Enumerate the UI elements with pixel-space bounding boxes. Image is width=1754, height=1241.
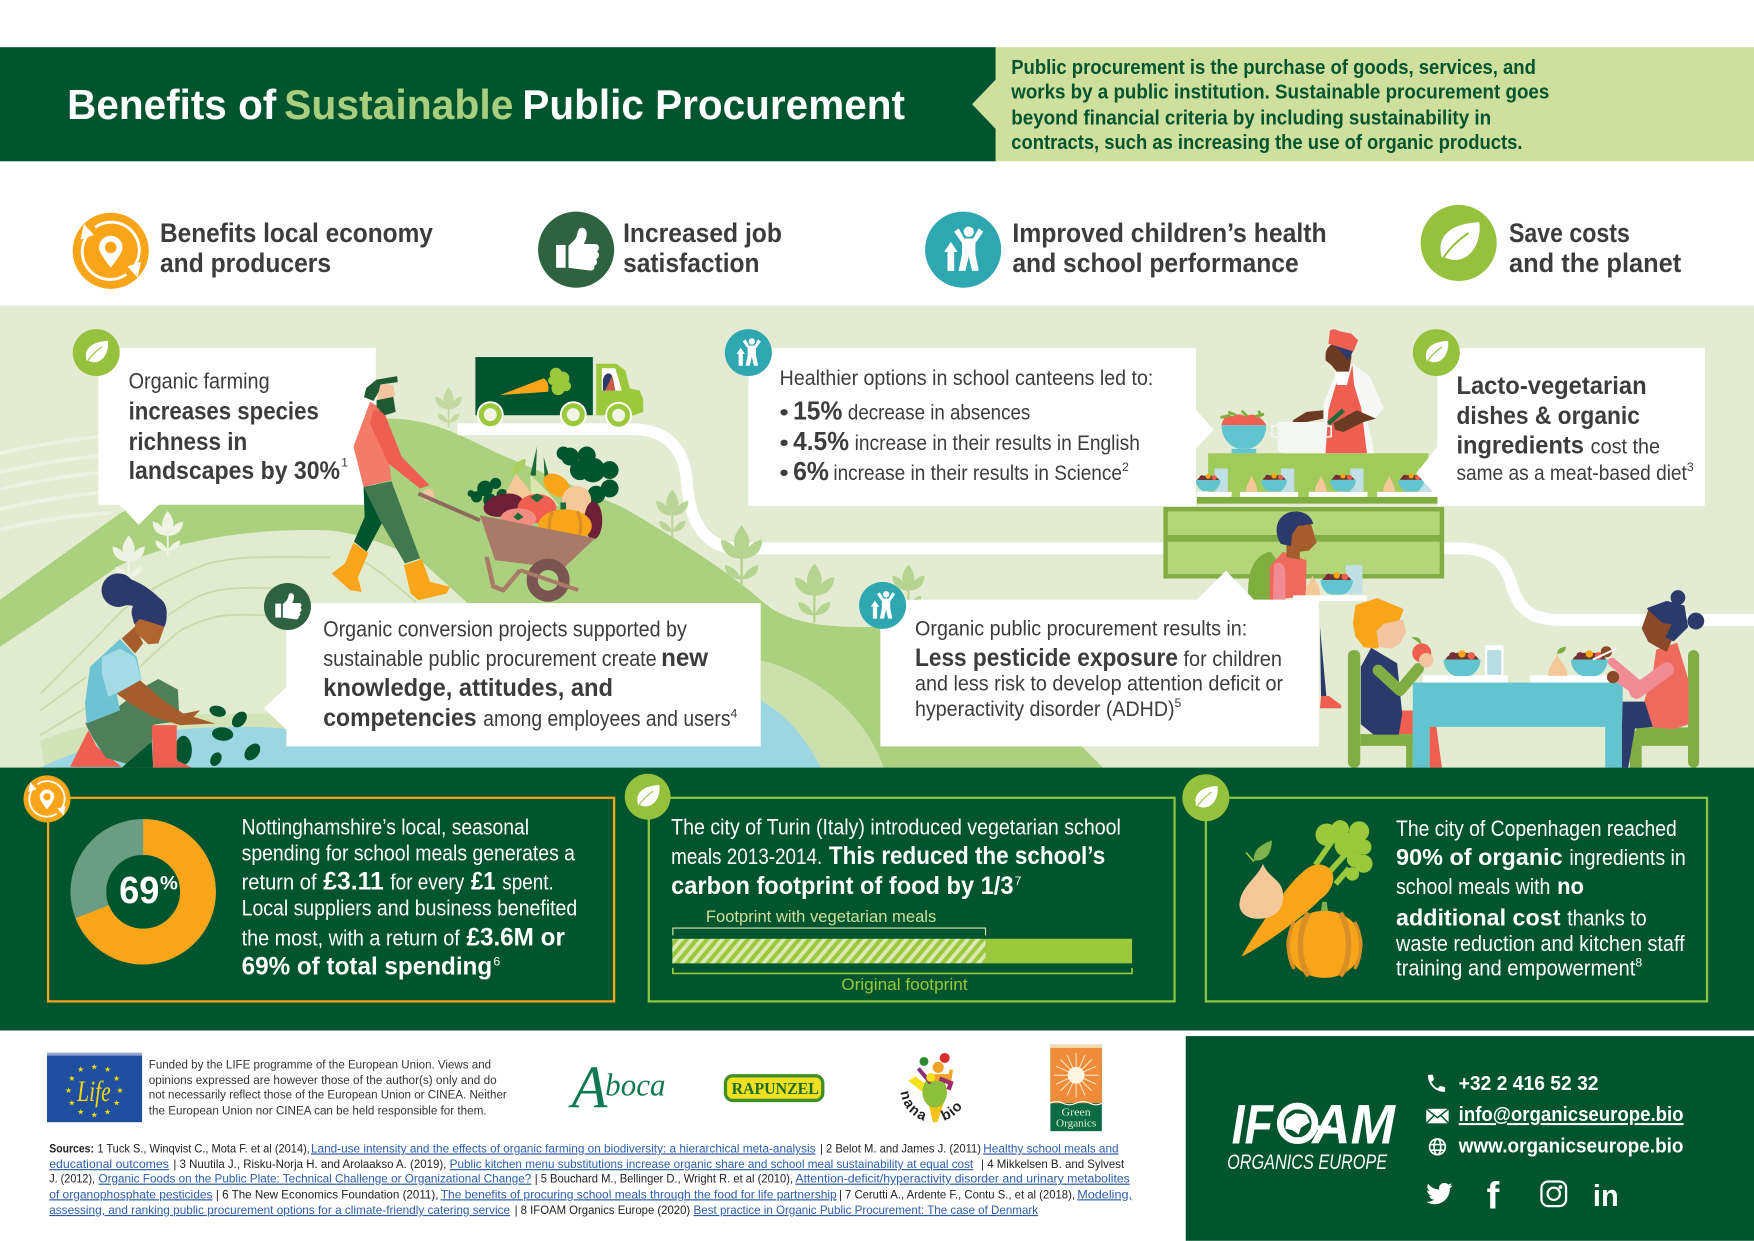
panel text: Turin: This reduced the school’s [829,843,1105,870]
logo: Green Organics [1050,1045,1102,1131]
logo: IFOAM Organics Europe: ORGANICS EUROPE [1227,1150,1388,1174]
icon: twitter [1426,1183,1453,1204]
callout text: lacto: same as a meat-based diet [1456,461,1687,485]
logo: EU LIFE: ★ [68,1098,75,1107]
logo: EU LIFE: Life [76,1076,111,1108]
callout text: species: 1 [341,456,348,470]
sources: Public kitchen menu substitutions increase organic share and school meal sustainability at equal cost [450,1157,974,1171]
callout: new competencies [264,583,761,746]
panel text: Nottinghamshire [242,815,577,981]
panel text: Turin: carbon footprint of food by 1/3 [671,873,1013,900]
logo: EU LIFE: ★ [104,1065,111,1074]
callout text: canteens: 4.5% [793,428,849,456]
callout text: canteens: increase in their results in Science [833,461,1122,485]
sources: educational outcomes [49,1157,169,1171]
callout text: competencies: among employees and users [483,706,730,731]
panel text: Nottinghamshire: the most, with a return of [242,925,460,950]
chef [1220,329,1384,453]
logo: EU LIFE: ★ [104,1107,111,1116]
panel text: Turin: meals 2013-2014. [671,844,822,869]
callout text: species: landscapes by 30% [129,458,340,485]
delivery truck [475,357,643,429]
benefit: local economy [73,213,433,289]
callout text: pesticide: and less risk to develop attention deficit or [915,671,1283,695]
panel text: Copenhagen: training and empowerment [1396,956,1635,981]
sources: Sources: [49,1141,94,1155]
callout: pesticide exposure [859,571,1319,746]
sources: Healthy school meals and [983,1141,1119,1155]
benefit: costs and planet [1421,205,1681,281]
panel text: Nottinghamshire: £3.6M or [466,924,565,951]
funding disclaimer: not necessarily reflect those of the European Union or CINEA. Neither [149,1088,507,1102]
title: Benefits of [67,82,277,128]
logo: Aboca: A [568,1055,608,1122]
benefit: job satisfaction: Increased job [623,218,782,248]
benefit: children's health: and school performance [1012,248,1299,278]
badge: location [23,775,70,822]
panel text: Nottinghamshire: spending for school meals generates a [242,840,575,865]
panel text: Nottinghamshire: Nottinghamshire’s local, seasonal [242,815,529,840]
header definition text: contracts, such as increasing the use of organic products. [1011,132,1522,154]
callout text: competencies: Organic conversion projects supported by [323,617,688,642]
logo: EU LIFE: ★ [116,1086,123,1095]
logo: IFOAM Organics Europe [1227,1092,1396,1174]
logo: EU LIFE: ★ [91,1063,98,1072]
logo: nana bio: bio [940,1103,962,1121]
sources: | 6 The New Economics Foundation (2011), [216,1187,439,1201]
landscape background [0,306,1754,768]
bowl of tomatoes [1222,414,1266,425]
sources: Organic Foods on the Public Plate: Technical Challenge or Organizational Change? [98,1172,532,1186]
callout text: competencies: knowledge, attitudes, and [323,675,613,702]
logo: Green Organics: Green [1062,1107,1091,1118]
panel text: Copenhagen: thanks to [1567,905,1647,930]
logo: nana bio [900,1053,962,1122]
wheelbarrow [418,494,480,520]
callout text: competencies: sustainable public procurement create [323,646,657,671]
sources: J. (2012), [49,1172,95,1186]
logo: EU LIFE: ★ [91,1111,98,1120]
benefit: job satisfaction: satisfaction [623,248,760,278]
callout text: canteens: decrease in absences [848,401,1030,425]
callout text: canteens: 15% [793,398,842,426]
donut chart 69%: 69 [119,870,159,912]
title [67,82,905,128]
children at table [1348,590,1704,768]
badge: leaf [625,774,671,820]
callout text: species: richness in [129,429,247,456]
benefit: costs and planet: Save costs [1509,218,1630,248]
callout text: species [129,368,348,485]
callout text: canteens: • [780,460,789,485]
icon: linkedin: in [1593,1180,1619,1213]
icon: phone [1428,1075,1445,1092]
panel text: Nottinghamshire: return of [242,870,317,895]
logo: EU LIFE: ★ [77,1107,84,1116]
panel text: Copenhagen: school meals with [1396,874,1550,899]
icon: globe [1430,1139,1445,1155]
pot [1277,422,1325,453]
callout text: canteens: • [780,400,789,425]
callout text: pesticide: for children [1184,647,1282,671]
panel text: Copenhagen: no [1557,873,1584,899]
donut chart 69%: % [160,874,178,895]
header definition text: Public procurement is the purchase of goods, services, and [1011,57,1536,79]
callout text: pesticide: 5 [1175,696,1182,710]
title: Public Procurement [522,82,905,128]
logo: Rapunzel [724,1074,824,1102]
sources: | 5 Bouchard M., Bellinger D., Wright R. et al (2010), [535,1172,793,1186]
panel text: Turin [671,815,1121,900]
callout text: canteens: • [780,430,789,455]
logo: EU LIFE: ★ [68,1074,75,1083]
footprint bar chart: Original footprint [841,975,968,994]
icon: instagram [1541,1181,1566,1206]
callout text: canteens: 6% [793,458,829,486]
callout text: pesticide [915,617,1283,721]
contact: email: info@organicseurope.bio [1459,1104,1684,1126]
header band [0,47,1754,161]
icon: mail [1426,1109,1449,1123]
case studies band [0,768,1754,1030]
logo: nana bio: nana [900,1091,926,1121]
callout text: species: increases species [129,399,319,426]
panel text: Nottinghamshire: Local suppliers and business benefited [242,895,577,920]
sources: The benefits of procuring school meals through the food for life partnership [441,1187,837,1201]
badge: children [859,582,906,629]
icon: facebook: f [1487,1175,1500,1217]
benefit: children's health [925,212,1327,288]
funding disclaimer: opinions expressed are however those of the author(s) only and do [149,1073,497,1087]
benefit: costs and planet: and the planet [1509,248,1681,278]
sources: Best practice in Organic Public Procurement: The case of Denmark [694,1203,1039,1217]
sources: 1 Tuck S., Winqvist C., Mota F. et al (2014), [97,1141,310,1155]
sources: | 8 IFOAM Organics Europe (2020) [515,1203,690,1217]
panel text: Nottinghamshire: spent. [502,870,554,895]
badge: leaf [1182,774,1229,821]
woman planting [70,573,263,768]
callout text: lacto: 3 [1687,460,1694,474]
badge: thumb [264,583,311,630]
header definition text: works by a public institution. Sustainable procurement goes [1010,82,1549,104]
callout text: lacto: Lacto-vegetarian [1456,373,1647,400]
badge: leaf [73,329,120,376]
logo: EU LIFE: ★ [65,1086,72,1095]
sources: | 7 Cerutti A., Ardente F., Contu S., et al (2018), [839,1187,1075,1201]
callout: species richness [73,329,376,525]
panel text: Copenhagen: The city of Copenhagen reached [1396,816,1677,841]
logo: Aboca [568,1055,666,1122]
benefit: local economy: and producers [160,248,331,278]
callout text: species: Organic farming [129,368,270,393]
logo: Green Organics: Organics [1056,1119,1096,1130]
sources: assessing, and ranking public procurement options for a climate-friendly catering service [49,1203,510,1217]
callout text: lacto: dishes & organic [1456,403,1640,430]
badge: leaf [1413,329,1460,376]
callout: lacto-vegetarian [1413,329,1705,506]
panel text: Nottinghamshire: £3.11 [323,869,384,896]
sources: Attention-deficit/hyperactivity disorder and urinary metabolites [795,1172,1130,1186]
panel text: Copenhagen: additional cost [1396,904,1561,930]
contact panel [1186,1036,1754,1241]
panel text: Copenhagen: 8 [1635,956,1642,970]
logo: EU LIFE: ★ [77,1065,84,1074]
benefit: job satisfaction [538,212,782,288]
callout text: competencies: new [661,645,709,672]
icon: vegetables [1239,820,1373,978]
logo: Aboca: boca [605,1067,666,1102]
child with tray [1248,511,1367,708]
header definition text: beyond financial criteria by including sustainability in [1011,107,1491,129]
panel: Copenhagen [1182,774,1707,1001]
sources: Modeling, [1077,1187,1132,1201]
benefit: children's health: Improved children’s health [1012,218,1327,248]
logo: IFOAM Organics Europe: AM [1310,1092,1396,1155]
callout text: pesticide: Less pesticide exposure [915,645,1178,672]
logo: EU LIFE: ★ [113,1098,120,1107]
leaves being planted [208,704,263,768]
callout text: pesticide: hyperactivity disorder (ADHD) [915,697,1175,721]
callout text: pesticide: Organic public procurement results in: [915,617,1247,641]
sources [49,1141,1132,1217]
funding disclaimer: Funded by the LIFE programme of the European Union. Views and [149,1058,491,1072]
benefit: local economy: Benefits local economy [160,218,433,248]
donut chart 69% [88,837,198,947]
logo: Rapunzel: RAPUNZEL [732,1079,819,1098]
callout text: competencies: competencies [323,705,477,732]
panel text: Copenhagen [1395,816,1686,981]
sources: of organophosphate pesticides [49,1187,213,1201]
sprouts [113,387,924,623]
canteen counter [1166,453,1442,576]
panel text: Nottinghamshire: 6 [493,955,500,969]
logo: IFOAM Organics Europe: IF [1232,1092,1275,1155]
callout text: canteens [780,366,1153,486]
callout text: competencies [323,617,737,732]
logo: EU LIFE: ★ [113,1074,120,1083]
funding disclaimer [149,1058,507,1117]
panel text: Copenhagen: 90% of organic [1396,844,1563,870]
sources: | 2 Belot M. and James J. (2011) [820,1141,981,1155]
callout: healthier options [725,329,1214,506]
road [458,429,1754,620]
panel text: Copenhagen: waste reduction and kitchen staff [1395,931,1685,956]
panel text: Nottinghamshire: for every [390,870,465,895]
logo: EU LIFE [47,1053,142,1122]
sources: | 3 Nuutila J., Risku-Norja H. and Arolaakso A. (2019), [173,1157,446,1171]
sources: | 4 Mikkelsen B. and Sylvest [981,1157,1125,1171]
panel: Turin [625,774,1175,1001]
callout text: canteens: 2 [1122,460,1129,474]
badge: children [725,329,772,376]
callout text: competencies: 4 [730,706,737,720]
contact: website: www.organicseurope.bio [1458,1135,1684,1157]
sources: Land-use intensity and the effects of organic farming on biodiversity: a hierarchical meta-analysis [311,1141,815,1155]
panel text: Copenhagen: ingredients in [1569,845,1686,870]
callout text: lacto [1456,373,1694,485]
header definition text [1010,57,1549,154]
farmer with wheelbarrow [332,377,619,600]
panel text: Nottinghamshire: £1 [471,869,496,896]
panel text: Nottinghamshire: 69% of total spending [242,954,492,981]
callout text: lacto: ingredients [1456,432,1584,459]
contact: phone number: +32 2 416 52 32 [1459,1073,1599,1095]
title: Sustainable [284,82,513,128]
footprint bar chart [672,907,1132,994]
callout text: lacto: cost the [1591,434,1660,458]
callout text: canteens: Healthier options in school canteens led to: [780,366,1153,390]
panel: Nottinghamshire [23,775,614,1001]
panel text: Turin: 7 [1015,874,1022,888]
callout text: canteens: increase in their results in English [855,431,1140,455]
funding disclaimer: the European Union nor CINEA can be held responsible for them. [149,1103,487,1117]
panel text: Turin: The city of Turin (Italy) introduced vegetarian school [671,815,1121,840]
footprint bar chart: Footprint with vegetarian meals [706,907,936,926]
vegetables in barrow [557,447,619,504]
